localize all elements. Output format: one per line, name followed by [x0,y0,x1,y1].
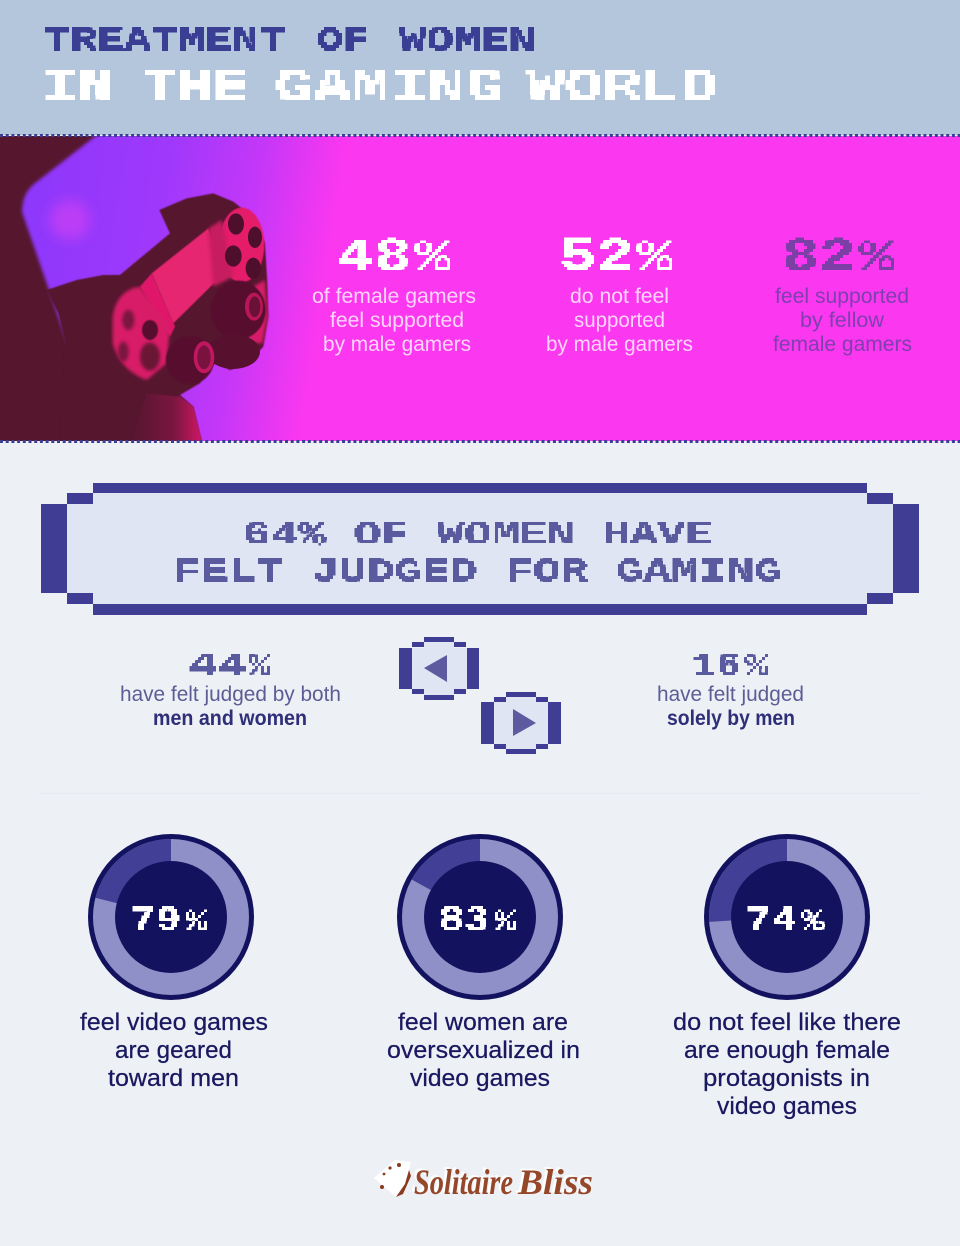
image: game controller photo [0,120,268,460]
title line 2: IN [43,60,113,116]
glow spot [50,200,90,240]
label: 83%: oversexualized in [387,1037,580,1064]
stat: 44% judged by both: men and women [153,707,307,730]
stat: 82%: female gamers [773,333,912,356]
stat: 52%: supported [574,309,665,332]
stat: 48% [312,232,476,356]
stat: 82%: by fellow [800,309,885,332]
logo wordmark: Solitaire [414,1162,513,1202]
donut chart: 74%: 74 [746,901,797,941]
title line 1: TREATMENT [43,23,286,61]
stat: 44% judged by both: % [248,650,271,685]
donut chart: 79%: 79 [131,901,181,941]
label: 79% [80,1009,268,1092]
banner text: 64% OF WOMEN HAVE [243,517,713,554]
label: 79%: feel video games [80,1009,268,1036]
label: 74% [673,1009,901,1120]
stat: 52%: by male gamers [546,333,693,356]
label: 79%: are geared [115,1037,232,1064]
stat: 82%: 82 [782,232,856,285]
stat: 16% judged by men: solely by men [667,707,795,730]
stat: 52%: 52 [559,232,634,285]
stat: 16% judged by men: % [745,650,770,685]
title line 2: WORLD [527,60,717,116]
title line 1: WOMEN [399,23,536,61]
label: 79%: toward men [108,1065,239,1092]
stat: 52%: % [637,234,674,284]
stat: 82%: % [859,234,896,284]
stat: 16% judged by men [657,648,804,730]
dark foreground shape [0,136,98,441]
controller [47,193,268,450]
label: 74%: video games [717,1093,857,1120]
stat: 52% [546,232,693,356]
header panel [0,0,960,135]
donut chart: 83% [397,834,563,1000]
icon: right arrow button [481,692,561,754]
label: 83%: video games [410,1065,550,1092]
title line 2 [43,60,717,116]
donut chart: 74% [704,834,870,1000]
stat: 48%: feel supported [330,309,464,332]
banner text [173,517,782,591]
donut chart: 83%: 83 [439,901,489,941]
logo: Solitaire Bliss [374,1160,593,1202]
stat: 82%: feel supported [775,285,909,308]
banner: 64% of women [41,483,919,615]
stat: 44% judged by both: have felt judged by both [120,683,341,706]
label: 83%: feel women are [398,1009,568,1036]
label: 74%: do not feel like there [673,1009,901,1036]
bottom dotted edge [0,440,960,443]
stat: 52%: do not feel [570,285,669,308]
stat: 48%: by male gamers [323,333,471,356]
donut chart: 83%: % [494,906,518,940]
stat: 16% judged by men: have felt judged [657,683,804,706]
panel: support statistics band [0,120,960,460]
stat: 16% judged by men: 16 [692,648,741,685]
title line 1: OF [317,23,369,61]
banner text: FELT JUDGED FOR GAMING [173,554,782,591]
label: 74%: protagonists in [703,1065,870,1092]
icon: left arrow button [399,637,479,700]
donut chart: 79% [88,834,254,1000]
stat: 44% judged by both [120,648,341,730]
logo wordmark: Bliss [517,1162,593,1202]
donut chart: 79%: % [185,906,209,940]
title line 2: GAMING [275,60,504,116]
stat: 44% judged by both: 44 [189,648,247,685]
stat: 48%: % [415,234,452,284]
donut chart: 74%: % [801,906,825,940]
title line 2: THE [142,60,249,116]
stat: 48%: 48 [337,232,411,285]
stat: 82% [773,232,912,356]
icon: card fan [374,1160,411,1197]
label: 74%: are enough female [684,1037,890,1064]
label: 83% [387,1009,580,1092]
stat: 48%: of female gamers [312,285,476,308]
title line 1 [43,23,536,61]
top dotted edge [0,134,960,137]
